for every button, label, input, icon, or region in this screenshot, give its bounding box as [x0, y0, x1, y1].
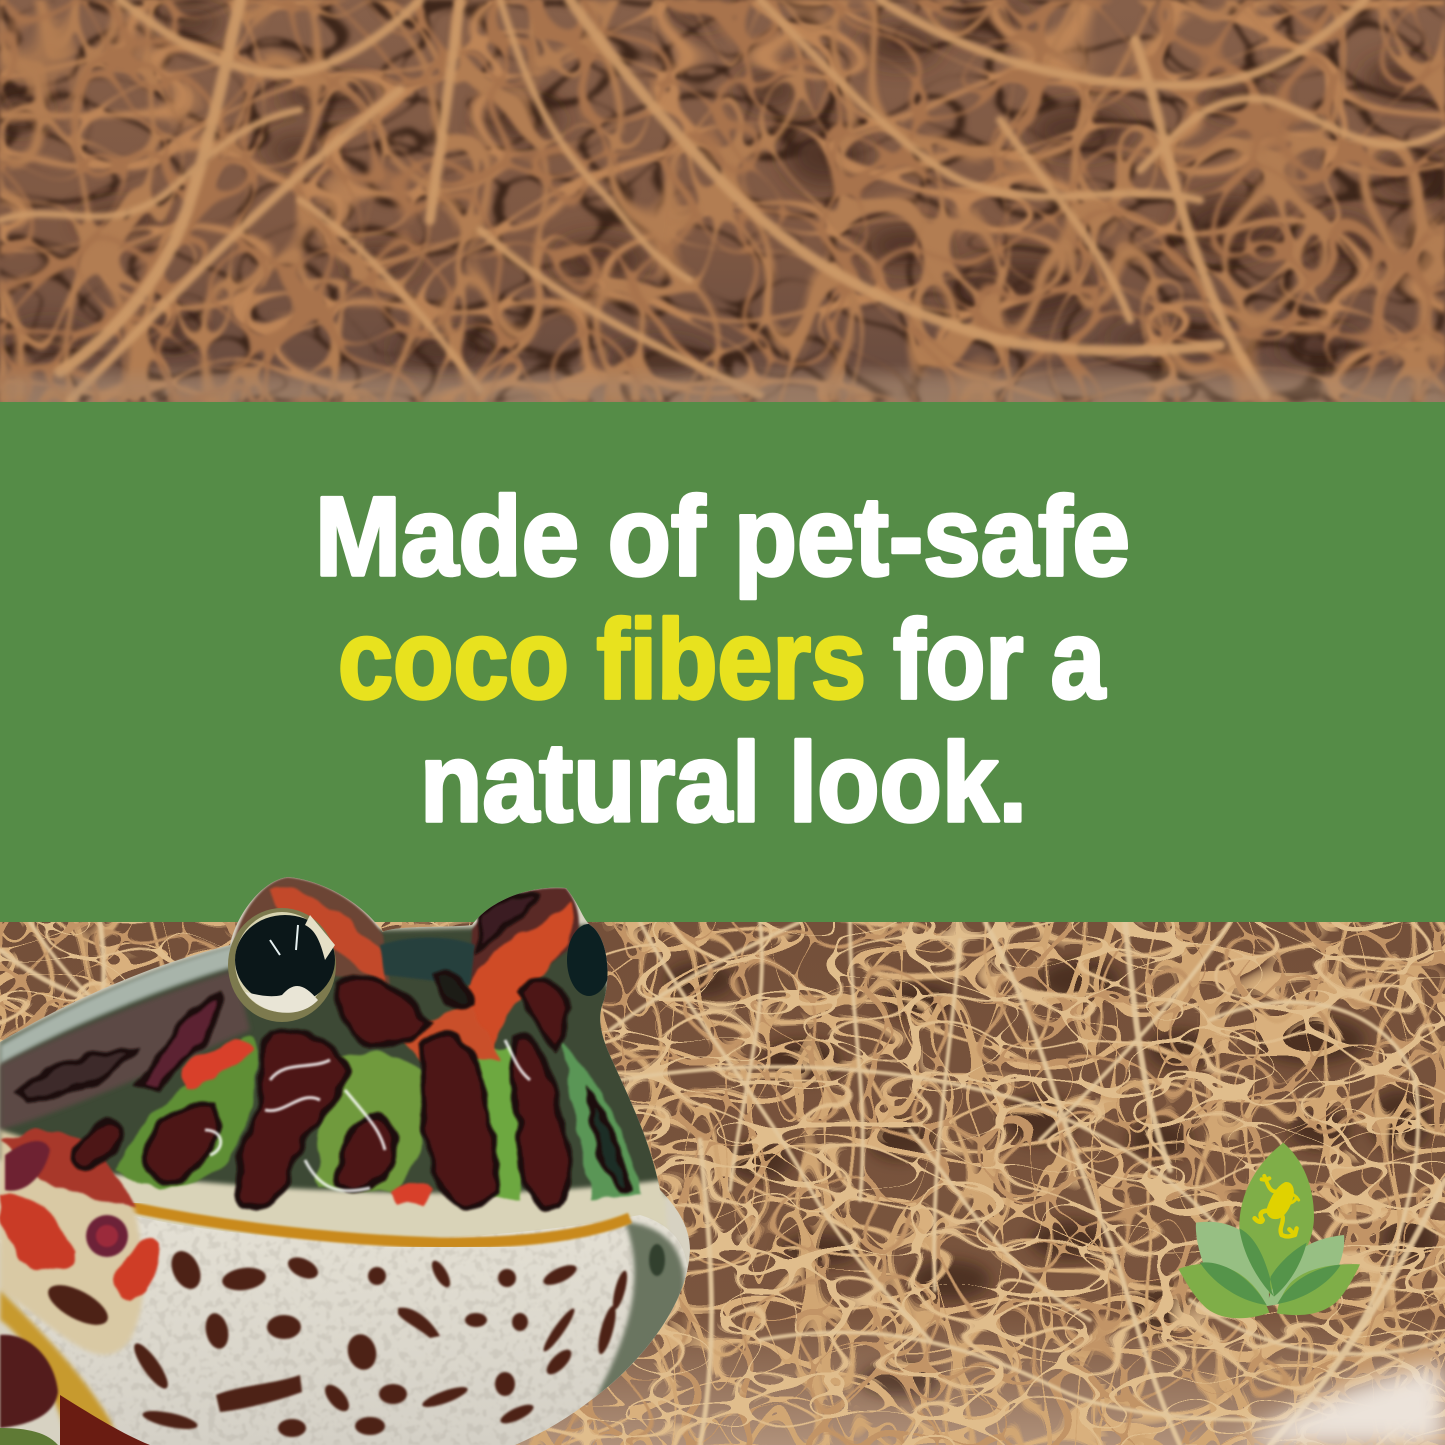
frog head base [0, 925, 668, 1205]
dark maroon head markings [20, 893, 628, 1208]
logo bottom right leaf [1277, 1264, 1360, 1315]
belly [0, 1215, 687, 1445]
green banner [0, 402, 1445, 922]
logo frog silhouette [1255, 1176, 1299, 1236]
red-orange ridges [465, 905, 574, 1050]
soft lower band of the fibre photo [0, 375, 1445, 402]
yellow-orange lip line [130, 1207, 630, 1243]
frog right eye [567, 924, 611, 996]
headline line 2: highlighted: coco fibers [338, 597, 866, 722]
photo: coco fiber close-up (top) [0, 0, 1445, 402]
horns [232, 877, 390, 985]
flank mottled spots [5, 1141, 128, 1257]
horned frog photo illustration [0, 870, 700, 1445]
left body yellow ridge and dark leg [0, 1288, 118, 1430]
frog base body [0, 870, 700, 1445]
logo middle right leaf [1267, 1235, 1344, 1306]
belly spots [42, 1244, 665, 1437]
flank: cream with speckled red [0, 1130, 144, 1355]
headline line 1: Made of pet-safe [315, 474, 1130, 599]
red mottling on head [185, 1042, 432, 1205]
specular highlights [205, 1040, 530, 1191]
logo top leaf [1239, 1143, 1314, 1297]
logo leaf overlaps [1200, 1228, 1341, 1305]
logo middle left leaf [1196, 1222, 1269, 1306]
frog snout lower band [112, 1171, 666, 1236]
logo: leaves with frog [1178, 1143, 1360, 1318]
belly grain [0, 1215, 687, 1445]
headline [315, 474, 1130, 845]
headline line 2: remainder: for a [893, 597, 1106, 722]
logo bottom left leaf [1178, 1264, 1269, 1318]
frog left eye [228, 908, 336, 1022]
frog head back, pale blurred [0, 945, 240, 1065]
photo: coco fiber strands (bottom) [0, 922, 1445, 1445]
headline line 3: natural look. [420, 720, 1027, 845]
bright highlight in bottom-right corner [1240, 1362, 1445, 1445]
green head patches [115, 1039, 640, 1200]
